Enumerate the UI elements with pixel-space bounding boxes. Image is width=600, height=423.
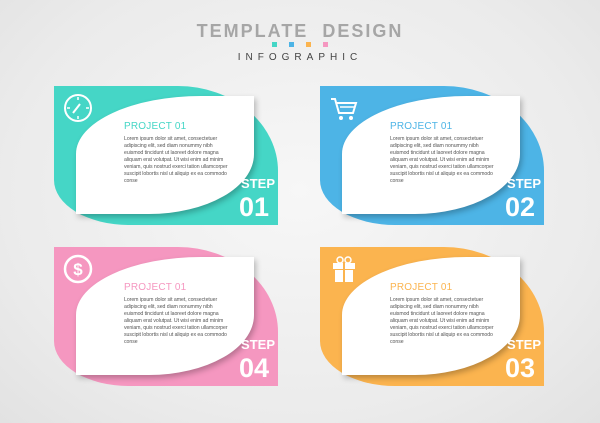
heading: PROJECT 01 xyxy=(124,121,186,132)
icon: cart xyxy=(331,98,358,120)
panel: step 01: 01 xyxy=(239,192,269,222)
panel: step 04 xyxy=(54,247,278,386)
text block: Lorem ipsum dolor sit amet, consectetuer adipiscing elit, sed diam nonummy nibh euismod tincidunt ut laoreet dolore magna aliquam erat volutpat. Ut wisi enim ad minim veniam, quis nostrud exerci tation ullamcorper suscipit lobortis nisl ut aliquip ex ea commodo conse xyxy=(124,136,228,184)
title: TEMPLATE DESIGN xyxy=(197,21,403,41)
icon: dollar: $ xyxy=(73,260,83,279)
text block: Lorem ipsum dolor sit amet, consectetuer adipiscing elit, sed diam nonummy nibh euismod tincidunt ut laoreet dolore magna aliquam erat volutpat. Ut wisi enim ad minim veniam, quis nostrud exerci tation ullamcorper suscipit lobortis nisl ut aliquip ex ea commodo conse xyxy=(390,297,494,345)
text block: Lorem ipsum dolor sit amet, consectetuer adipiscing elit, sed diam nonummy nibh euismod tincidunt ut laoreet dolore magna aliquam erat volutpat. Ut wisi enim ad minim veniam, quis nostrud exerci tation ullamcorper suscipit lobortis nisl ut aliquip ex ea commodo conse xyxy=(124,297,228,345)
panel: step 02: 02 xyxy=(505,192,535,222)
icon: gift xyxy=(333,256,355,282)
subtitle: INFOGRAPHIC xyxy=(238,52,362,63)
panel: step 01 xyxy=(54,86,278,225)
panel: step 02 xyxy=(320,86,544,225)
heading: PROJECT 01 xyxy=(124,282,186,293)
heading: PROJECT 01 xyxy=(390,282,452,293)
step label: STEP xyxy=(507,337,541,352)
step label: STEP xyxy=(507,176,541,191)
colour squares xyxy=(272,42,328,47)
icon: dollar xyxy=(64,254,92,284)
panel: step 04: 04 xyxy=(239,353,269,383)
step label: STEP xyxy=(241,176,275,191)
step label: STEP xyxy=(241,337,275,352)
icon: clock xyxy=(64,94,92,122)
panel: step 03: 03 xyxy=(505,353,535,383)
heading: PROJECT 01 xyxy=(390,121,452,132)
text block: Lorem ipsum dolor sit amet, consectetuer adipiscing elit, sed diam nonummy nibh euismod tincidunt ut laoreet dolore magna aliquam erat volutpat. Ut wisi enim ad minim veniam, quis nostrud exerci tation ullamcorper suscipit lobortis nisl ut aliquip ex ea commodo conse xyxy=(390,136,494,184)
panel: step 03 xyxy=(320,247,544,386)
